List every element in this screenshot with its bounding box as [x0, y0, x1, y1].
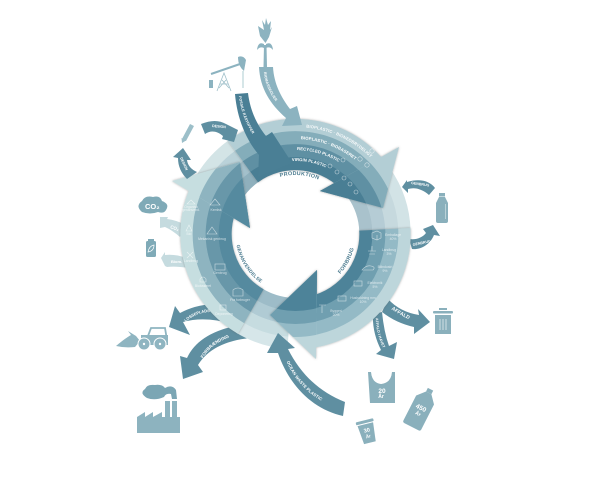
- heading: genanvendelse: GENANVENDELSE: [236, 244, 262, 283]
- icon: cup 30 years: [356, 418, 379, 445]
- consumption sector labels: 40%: [390, 237, 396, 241]
- icon: CO2 cloud: CO₂: [145, 202, 160, 211]
- arrow band: genanvendelse: [172, 161, 264, 334]
- heading: produktion: PRODUKTION: [280, 171, 320, 180]
- arrow: design top left: [201, 121, 238, 142]
- recycling sector labels: [182, 199, 251, 316]
- consumption sector labels: Emballage: [385, 233, 401, 237]
- band labels: plastic types: VIRGIN PLASTIC: [292, 158, 326, 168]
- band labels: plastic types: BIOPLASTIC · BIONEDBRYDELIGT: [306, 124, 372, 157]
- arrow: design top left: DESIGN: [212, 124, 226, 129]
- recycling sector labels: Deponering: [215, 312, 233, 316]
- arrow: lossepladsen: LOSSEPLADS: [184, 309, 210, 322]
- consumption sector labels: Husholdning mm: [350, 296, 376, 300]
- arrow: genbrug top right: GENBRUG: [411, 181, 430, 188]
- consumption sector labels: 20%: [333, 313, 339, 317]
- arrow band: produktion: [227, 118, 400, 209]
- icon: trash bin: [433, 308, 453, 334]
- arrow band: forbrug: [270, 227, 412, 360]
- circular economy ring: [172, 118, 412, 360]
- arrow: genbrug bottom right: [409, 225, 440, 249]
- icon: bio bottle: [146, 239, 156, 257]
- recycling sector labels: Bio: [187, 232, 192, 236]
- band labels: plastic types: RECYCLED PLASTIC: [297, 147, 340, 162]
- arrow: design left: [173, 148, 197, 179]
- recycling sector labels: Kemisk: [210, 208, 222, 212]
- arrow: affald i havet: [372, 312, 397, 359]
- arrow: ocean waste plastic: OCEAN WASTE PLASTIC: [287, 361, 322, 400]
- arrow: biomasse to ring: [161, 252, 188, 268]
- recycling sector labels: Genbrug: [213, 271, 227, 275]
- tail: forbrug overlap: [144, 82, 447, 386]
- consumption sector labels: Landbrug: [382, 248, 396, 252]
- consumption sector labels: Elektronik: [368, 281, 383, 285]
- arrow: genbrug bottom right: GENBRUG: [412, 239, 431, 247]
- consumption sector labels: 10%: [360, 300, 366, 304]
- icon: cup 30 years: År: [365, 432, 372, 439]
- band labels: plastic types: BIOPLASTIC · BIOBASERET: [301, 136, 357, 160]
- recycling sector labels: Biobaseret: [195, 284, 211, 288]
- icon: pencil: [182, 125, 192, 143]
- icon: bottle 450 years: 450: [414, 403, 428, 414]
- tail: genanvendelse overlap: [179, 118, 412, 350]
- arrow: lossepladsen: [169, 304, 220, 335]
- icon: bottle: [436, 193, 448, 223]
- recycling sector labels: Organisk: [184, 205, 198, 209]
- arrow: forbrænding: FORBRÆNDING: [200, 335, 229, 358]
- arrow: genbrug top right: [402, 180, 435, 195]
- tail: produktion overlap: [146, 84, 445, 384]
- arrow: CO2 to ring: [160, 217, 186, 237]
- icon: plastic bag 20 years: [368, 372, 395, 403]
- arrow: forbrænding: [180, 328, 247, 379]
- icon: bottle 450 years: År: [414, 409, 422, 418]
- recycling sector labels: genanvend.: [182, 208, 200, 212]
- arrow: affald: AFFALD: [391, 307, 410, 318]
- icon: bottle 450 years: [403, 385, 439, 431]
- icon: wheel loader: [116, 328, 168, 350]
- arrow: affald: [382, 300, 430, 334]
- arrow: fossile råstoffer: FOSSILE RÅSTOFFER: [238, 96, 254, 134]
- icon: oil pump: [209, 56, 246, 91]
- recycling sector labels: Mekanisk genbrug: [198, 237, 226, 241]
- icon: cup 30 years: 30: [363, 427, 371, 435]
- consumption sector labels: [319, 231, 401, 317]
- band labels: plastic types: [292, 124, 372, 168]
- arrow: design left: DESIGN: [179, 157, 189, 171]
- consumption sector labels: 3%: [387, 252, 391, 256]
- arrow: ocean waste plastic: [267, 333, 345, 416]
- consumption sector labels: 5%: [373, 285, 377, 289]
- arrow: CO2 to ring: CO₂: [170, 224, 180, 232]
- arrow: biomasseolier: [259, 67, 302, 126]
- consumption sector labels: Byggeri: [330, 309, 342, 313]
- arrow: biomasseolier: BIOMASSEOLIER: [264, 72, 278, 102]
- arrow: affald i havet: AFFALD I HAVET: [376, 318, 386, 348]
- heading: forbrug: FORBRUG: [338, 248, 354, 274]
- icon: plastic bag 20 years: 20: [378, 388, 386, 395]
- icon: sugar cane: [257, 18, 273, 67]
- consumption sector labels: Bilindustri: [378, 265, 393, 269]
- recycling sector labels: Fra forbruger: [230, 298, 251, 302]
- consumption sector labels: 9%: [383, 269, 387, 273]
- icon: CO2 cloud: [138, 196, 167, 214]
- icon: plastic bag 20 years: År: [378, 393, 384, 400]
- icon: factory: [137, 385, 180, 433]
- recycling sector labels: Landbrug: [184, 259, 198, 263]
- icons: recycling marks on production bands: [328, 149, 374, 194]
- arrow: fossile råstoffer: [235, 93, 288, 166]
- arrow: biomasse to ring: Biom.: [171, 259, 182, 264]
